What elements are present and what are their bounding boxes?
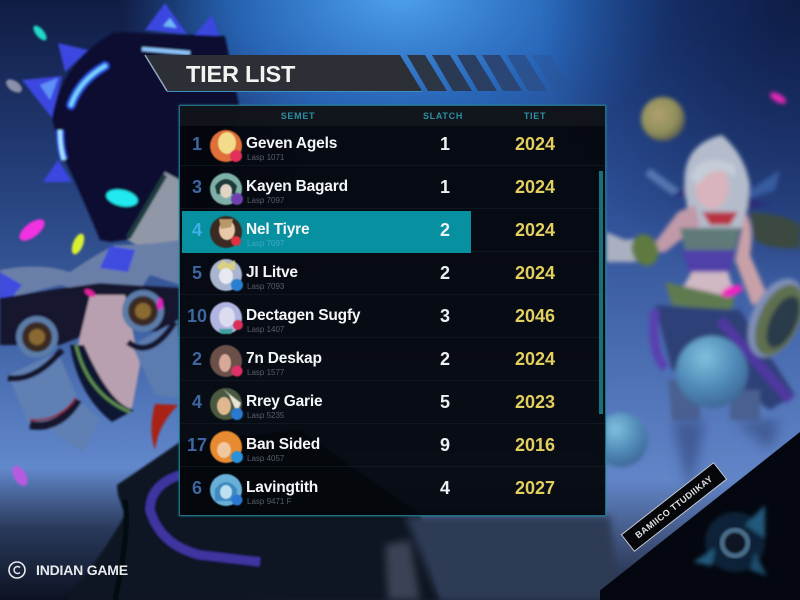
- row 4: [180, 252, 605, 295]
- row 5: 2046: [515, 306, 555, 326]
- row 2: 2024: [515, 177, 555, 197]
- row 9: Lasp 9471 F: [247, 497, 291, 506]
- row 2: Lasp 7097: [247, 196, 284, 205]
- row 8: 17: [187, 435, 207, 455]
- row 1: Geven Agels: [246, 135, 337, 152]
- lower body: [65, 430, 440, 600]
- icon: logo ring: [8, 561, 26, 579]
- row 8: 9: [440, 435, 450, 455]
- row 1: 1: [440, 134, 450, 154]
- row 5: 10: [187, 306, 207, 326]
- arms and gauntlets: [0, 240, 180, 489]
- row 1: [180, 123, 605, 166]
- row 7: 4: [192, 392, 202, 412]
- row 8: 2016: [515, 435, 555, 455]
- row 5: 3: [440, 306, 450, 326]
- row 4: JI Litve: [246, 264, 298, 281]
- row 5: [180, 295, 605, 338]
- row 4: 2: [440, 263, 450, 283]
- row 1: Lasp 1071: [247, 153, 284, 162]
- row 9: [192, 473, 555, 507]
- table header: [180, 106, 605, 126]
- row 4: 2024: [515, 263, 555, 283]
- row 2: 3: [192, 177, 202, 197]
- scrollbar: [599, 171, 603, 414]
- row 8: Lasp 4057: [247, 454, 284, 463]
- row 7: 5: [440, 392, 450, 412]
- corner emblem: [600, 432, 800, 600]
- head and crown: [4, 3, 240, 260]
- row 3 highlighted: Lasp 7097: [247, 239, 284, 248]
- row 4: Lasp 7093: [247, 282, 284, 291]
- row 8: Ban Sided: [246, 436, 320, 453]
- row 2: Kayen Bagard: [246, 178, 348, 195]
- row 1: 2024: [515, 134, 555, 154]
- table header: TIET: [524, 111, 546, 121]
- right character: [594, 90, 800, 495]
- table header: SEMET: [281, 111, 315, 121]
- footer logo: [8, 561, 128, 579]
- title banner: [144, 54, 561, 92]
- row 3 highlighted: 2: [440, 220, 450, 240]
- row 9: Lavingtith: [246, 479, 318, 496]
- row 1: 1: [192, 134, 202, 154]
- row 6: Lasp 1577: [247, 368, 284, 377]
- row 2: 1: [440, 177, 450, 197]
- row 9: 2027: [515, 478, 555, 498]
- row 9: 6: [192, 478, 202, 498]
- footer logo: INDIAN GAME: [36, 562, 128, 578]
- row 9: 4: [440, 478, 450, 498]
- title banner: TIER LIST: [186, 61, 295, 87]
- row 3 highlighted: 4: [192, 220, 202, 240]
- row 7: Rrey Garie: [246, 393, 322, 410]
- panel: tier table: [179, 105, 606, 516]
- row 3 highlighted: 2024: [515, 220, 555, 240]
- stamp label: BAMIICO TTUDIIKAY: [633, 474, 715, 540]
- row 3 highlighted: [180, 209, 605, 252]
- stamp label: [621, 462, 727, 552]
- row 8: [180, 424, 605, 467]
- row 6: 2: [192, 349, 202, 369]
- row 7: [180, 381, 605, 424]
- row 6: [180, 338, 605, 381]
- row 6: 2: [440, 349, 450, 369]
- row 6: 2024: [515, 349, 555, 369]
- row 7: 2023: [515, 392, 555, 412]
- row 7: Lasp 5235: [247, 411, 284, 420]
- row 2: [180, 166, 605, 209]
- table header: SLATCH: [423, 111, 463, 121]
- row 4: 5: [192, 263, 202, 283]
- row 5: Lasp 1407: [247, 325, 284, 334]
- row 5: Dectagen Sugfy: [246, 307, 360, 324]
- row 3 highlighted: Nel Tiyre: [246, 221, 309, 238]
- row 6: 7n Deskap: [246, 350, 322, 367]
